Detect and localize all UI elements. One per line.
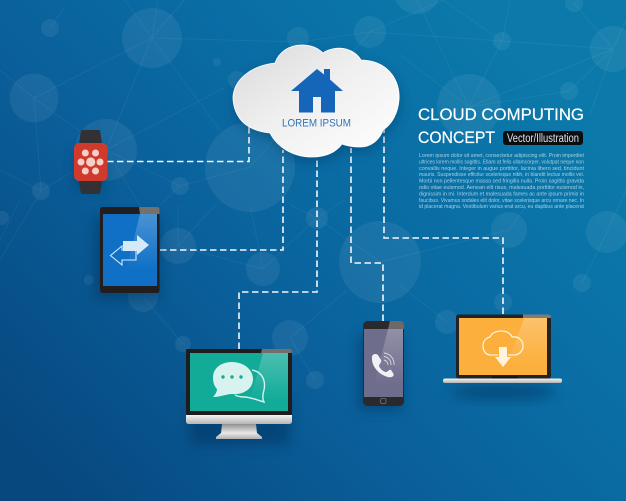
connector: tablet to cloud [160,150,283,250]
body text: Morbi non pellentesque massa sed fringilla nulla. Proin sagittis gravida [419,179,584,185]
title: CONCEPT [418,128,495,147]
body text: convallis neque. Integer in augue porttitor, lacinia libero sed, tincidunt [419,166,585,172]
body text: odio vitae euismod. Aenean elit risus, malesuada porttitor euismod in, [419,185,584,191]
device: tablet [94,207,160,300]
body text [419,153,585,210]
icon: phone call [372,353,394,377]
device: smartwatch [74,130,108,194]
body text: dignissim in mi. Interdum et malesuada fames ac ante ipsum primis in [419,191,584,197]
device: smartphone [358,321,404,411]
body text: Lorem ipsum dolor sit amet, consectetur adipiscing elit. Proin imperdiet [419,153,585,159]
icon: speech bubbles [213,362,264,402]
device: laptop [443,314,562,400]
icon: exchange arrows [110,235,149,265]
icon: cloud download [483,331,523,367]
body text: mauris. Suspendisse efficitur scelerisque nibh, in blandit lectus mollis vel. [419,172,584,178]
cloud [233,45,400,162]
icon: house [291,69,343,112]
body text: ultrices lorem mollis sagittis. Etiam at felis ullamcorper, volutpat neque non [419,159,584,165]
cloud label: LOREM IPSUM [282,118,351,130]
connector: laptop to cloud [384,125,503,314]
body text: id placerat magna. Vestibulum varius erat arcu, eu dapibus ante placerat [419,204,585,210]
badge: vector illustration: Vector/Illustration [507,133,579,145]
connector: monitor to cloud [239,150,317,349]
body text: faucibus. Vivamus sodales elit dolor, vitae scelerisque arcu ornare nec. In [419,198,584,204]
connector: watch to cloud [107,125,249,162]
network pattern [0,0,626,389]
icon: watch dots [78,150,104,174]
title [418,105,584,147]
title: CLOUD COMPUTING [418,105,584,124]
device: desktop monitor [186,349,292,445]
connector: phone to cloud [351,148,383,321]
